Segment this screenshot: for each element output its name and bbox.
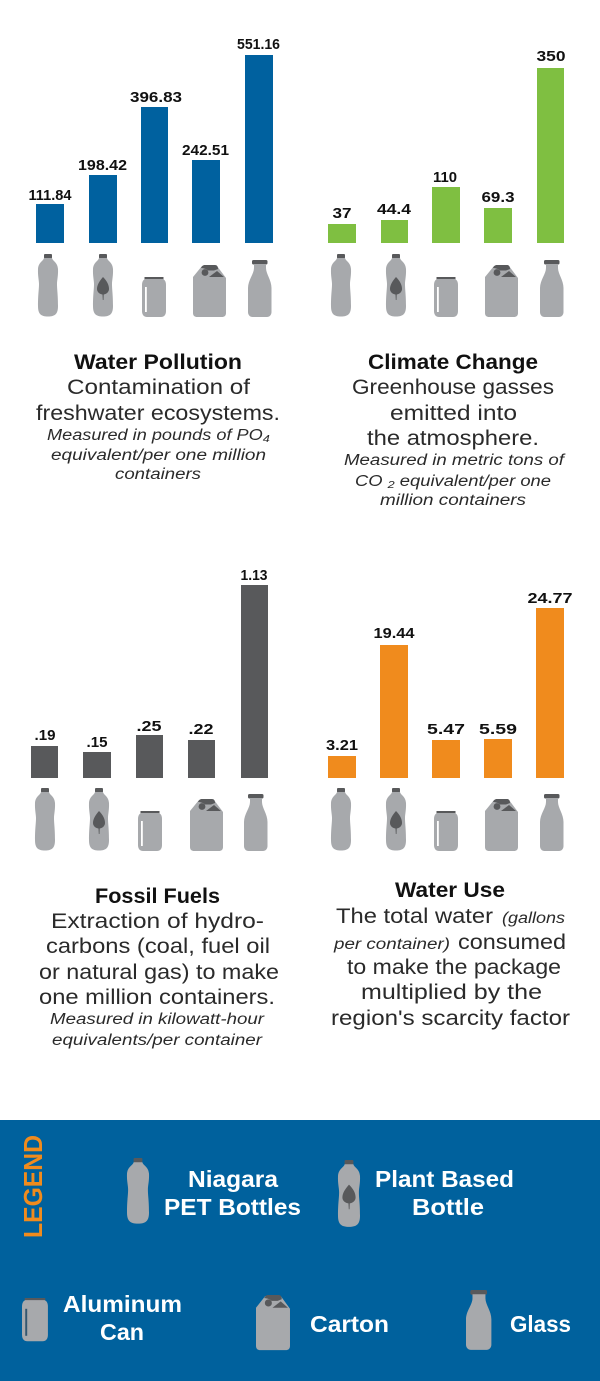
text: water use: consumed	[458, 931, 566, 954]
legend item: aluminum can: Aluminum	[63, 1291, 182, 1317]
bar chart: climate change: 44.4	[377, 201, 412, 218]
bar chart: fossil fuels: .15	[86, 734, 108, 751]
icons: water use containers	[331, 788, 564, 851]
legend item: Niagara PET bottles: Niagara	[188, 1166, 278, 1192]
text: water pollution: containers	[115, 466, 201, 483]
icons: water pollution containers	[38, 254, 272, 317]
text: water pollution: Contamination of	[67, 376, 250, 399]
text: climate change: million containers	[380, 492, 526, 509]
bar chart: water pollution: 551.16	[237, 36, 280, 53]
text: water use	[331, 879, 570, 1030]
text: climate change	[344, 351, 566, 509]
legend item: glass: Glass	[510, 1311, 571, 1337]
text: climate change: emitted into	[390, 402, 517, 425]
legend item: plant based bottle: Bottle	[412, 1194, 484, 1220]
legend item: plant based bottle	[338, 1160, 514, 1227]
bar chart: water pollution	[28, 36, 280, 243]
text: water pollution	[36, 351, 280, 483]
text: fossil fuels: Measured in kilowatt-hour	[50, 1011, 265, 1028]
panel: legend	[0, 1120, 600, 1381]
bar chart: fossil fuels	[31, 567, 268, 778]
icons: climate change containers	[331, 254, 564, 317]
bar chart: water use: 3.21	[326, 737, 358, 754]
legend item: aluminum can: Can	[100, 1319, 144, 1345]
bar chart: water pollution: 198.42	[78, 157, 127, 174]
bar chart: climate change	[328, 48, 566, 243]
bar chart: water pollution: 396.83	[130, 89, 182, 106]
bar chart: climate change: 350	[536, 48, 566, 65]
text: fossil fuels	[39, 885, 279, 1049]
legend item: carton	[256, 1295, 389, 1350]
text: fossil fuels: one million containers.	[39, 986, 275, 1009]
bar chart: climate change: 37	[332, 205, 352, 222]
bar chart: water use: 5.59	[479, 721, 517, 738]
text: climate change: Greenhouse gasses	[352, 376, 554, 399]
text: water use: per container)	[333, 936, 450, 953]
text: fossil fuels: carbons (coal, fuel oil	[46, 935, 270, 958]
legend item: plant based bottle: Plant Based	[375, 1166, 514, 1192]
text: climate change: CO ₂ equivalent/per one	[355, 473, 551, 490]
legend item: aluminum can	[22, 1291, 182, 1345]
panel: water pollution	[28, 36, 280, 483]
text: climate change: Measured in metric tons of	[344, 452, 566, 469]
bar chart: climate change: 69.3	[482, 189, 514, 206]
bar chart: fossil fuels: 1.13	[240, 567, 268, 584]
text: water use: multiplied by the	[361, 981, 542, 1004]
panel: climate change	[328, 48, 566, 509]
text: water use: region's scarcity factor	[331, 1007, 570, 1030]
bar chart: climate change: 110	[433, 169, 457, 186]
bar chart: water use	[326, 590, 572, 778]
text: water pollution: Water Pollution	[74, 351, 242, 374]
text: water use: (gallons	[502, 910, 565, 927]
legend item: Niagara PET bottles	[127, 1158, 301, 1224]
panel: fossil fuels	[31, 567, 279, 1049]
text: water use: The total water	[336, 905, 493, 928]
panel: water use	[326, 590, 572, 1030]
text: climate change: Climate Change	[368, 351, 538, 374]
bar chart: water use: 5.47	[427, 721, 465, 738]
bar chart: fossil fuels: .22	[188, 721, 214, 738]
text: fossil fuels: or natural gas) to make	[39, 961, 279, 984]
bar chart: fossil fuels: .25	[136, 718, 162, 735]
text: water use: Water Use	[395, 879, 505, 902]
bar chart: fossil fuels: .19	[34, 727, 56, 744]
text: water pollution: freshwater ecosystems.	[36, 402, 280, 425]
text: water pollution: equivalent/per one million	[51, 447, 266, 464]
bar chart: water use: 24.77	[528, 590, 572, 607]
legend item: Niagara PET bottles: PET Bottles	[164, 1194, 301, 1220]
icons: fossil fuels containers	[35, 788, 268, 851]
bar chart: water pollution: 111.84	[28, 187, 72, 204]
bar chart: water use: 19.44	[374, 625, 415, 642]
text: water use: to make the package	[347, 956, 561, 979]
text: climate change: the atmosphere.	[367, 427, 539, 450]
legend item: glass	[466, 1290, 571, 1350]
text: fossil fuels: Fossil Fuels	[95, 885, 220, 908]
text: water pollution: Measured in pounds of PO₄	[47, 427, 270, 444]
text: fossil fuels: equivalents/per container	[52, 1032, 263, 1049]
legend title: LEGEND	[18, 1135, 48, 1238]
bar chart: water pollution: 242.51	[182, 142, 229, 159]
legend item: carton: Carton	[310, 1311, 389, 1337]
text: fossil fuels: Extraction of hydro-	[51, 910, 264, 933]
